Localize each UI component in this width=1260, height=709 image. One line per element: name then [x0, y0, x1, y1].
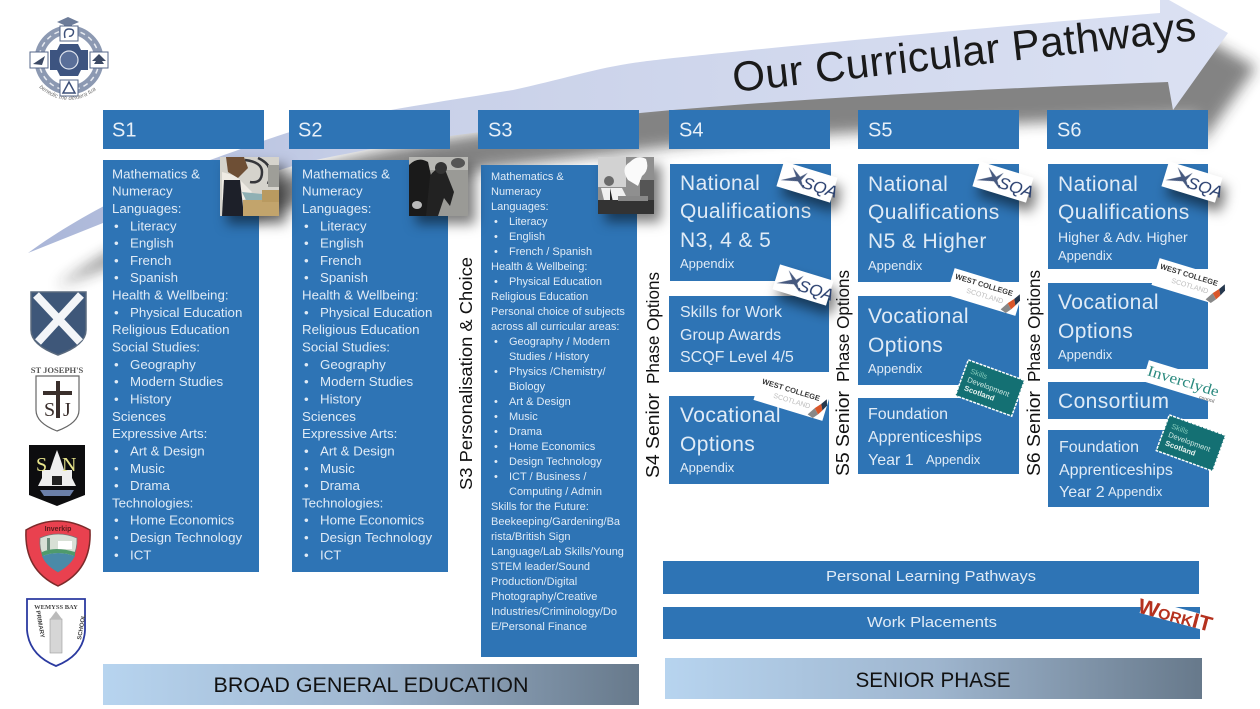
panel: S2 subjects: •: [304, 530, 309, 545]
panel: S2 subjects: History: [320, 391, 362, 406]
panel: S3 subjects: Skills for the Future:: [491, 501, 589, 513]
icon: SQA badge S4 skills: SQA: [796, 276, 836, 305]
panel: S2 subjects: •: [304, 478, 309, 493]
icon: St Ninian's shield: [29, 445, 85, 506]
panel: S1 subjects: Art & Design: [130, 443, 205, 458]
panel: S2 subjects: •: [304, 513, 309, 528]
panel: S6 Vocational Options: Vocational: [1058, 291, 1159, 314]
panel: S3 subjects: Design Technology: [509, 456, 602, 468]
icon: West College Scotland badge S4: WEST COLLEGE: [761, 377, 821, 403]
panel: S4 Skills for Work: Skills for Work: [680, 304, 783, 321]
panel: S4 header: [669, 110, 830, 149]
panel: S5 National Qualifications: N5 & Higher: [868, 230, 987, 253]
panel: S2 subjects: Design Technology: [320, 530, 432, 545]
bar: Work Placements: [663, 607, 1200, 639]
icon: Skills Development Scotland badge S5: Scotland: [963, 384, 996, 403]
icon: Wemyss Bay Primary School shield: PRIMARY: [34, 610, 45, 638]
panel: S6 Consortium: [1048, 382, 1208, 419]
panel: S5 National Qualifications: National: [868, 173, 948, 196]
panel: S2 subjects: •: [304, 270, 309, 285]
panel: S1 subjects: •: [114, 253, 119, 268]
title: Our Curricular Pathways: [730, 2, 1198, 101]
panel: S4 Vocational Options: Vocational: [680, 404, 781, 427]
panel: S1 subjects: Literacy: [130, 218, 177, 233]
panel: S2 subjects: •: [304, 253, 309, 268]
panel: S3 subjects: Art & Design: [509, 396, 571, 408]
panel: S6 Foundation Apprenticeships: Apprenticeships: [1059, 462, 1173, 479]
panel: S5 header: S5: [868, 120, 892, 142]
icon: Wemyss Bay Primary School shield: WEMYSS BAY: [34, 604, 78, 611]
panel: S1 subjects: French: [130, 253, 171, 268]
panel: S4 Skills for Work: Group Awards: [680, 327, 781, 344]
banner: Broad General Education: [103, 664, 639, 705]
panel: S2 subjects: •: [304, 236, 309, 251]
panel: S3 subjects: Languages:: [491, 201, 548, 213]
panel: S1 subjects: Health & Wellbeing:: [112, 288, 229, 303]
panel: S1 subjects: English: [130, 236, 174, 251]
panel: S3 subjects: Music: [509, 411, 538, 423]
photo: S3 classroom in black and white: [598, 157, 654, 214]
panel: S3 subjects: •: [494, 231, 498, 243]
panel: S4 Vocational Options: Options: [680, 433, 755, 456]
panel: S6 Vocational Options: Appendix: [1058, 347, 1113, 362]
icon: West College Scotland badge S5: [946, 268, 1024, 316]
panel: S3 subjects: •: [494, 216, 498, 228]
panel: S4 National Qualifications: N3, 4 & 5: [680, 229, 771, 252]
panel: S3 subjects: Drama: [509, 426, 543, 438]
panel: S2 subjects: Technologies:: [302, 495, 383, 510]
panel: S3 subjects: Industries/Criminology/Do: [491, 606, 617, 618]
panel: S2 subjects: Numeracy: [302, 184, 363, 199]
panel: S4 National Qualifications: National: [680, 172, 760, 195]
panel: S1 subjects: Technologies:: [112, 495, 193, 510]
icon: Skills Development Scotland badge S6: Development: [1167, 430, 1213, 454]
panel: S1 subjects: •: [114, 236, 119, 251]
rotated label: S6: Phase Options: [1024, 270, 1044, 382]
icon: St Joseph's shield: ST JOSEPH'S: [31, 365, 84, 375]
panel: S3 subjects: rista/British Sign: [491, 531, 570, 543]
banner: Senior Phase: [665, 658, 1202, 699]
icon: Skills Development Scotland badge S5: [955, 360, 1025, 416]
photo: S1 pupil in workshop: [220, 157, 279, 216]
panel: S6 Consortium: Consortium: [1058, 390, 1169, 413]
panel: S3 subjects: Physics /Chemistry/: [509, 366, 607, 378]
panel: S3 subjects: Mathematics &: [491, 171, 564, 183]
icon: West College Scotland badge S6: [1151, 258, 1229, 306]
panel: S1 subjects: Modern Studies: [130, 374, 223, 389]
rotated label: S4: S4 Senior: [642, 393, 663, 478]
panel: S3 subjects: •: [494, 441, 498, 453]
panel: S1 header: S1: [112, 120, 136, 142]
icon: West College Scotland badge S6: SCOTLAND: [1170, 278, 1209, 296]
panel: S5 Vocational Options: Vocational: [868, 305, 969, 328]
panel: S6 National Qualifications: Appendix: [1058, 248, 1113, 263]
icon: St Joseph's shield: [31, 365, 84, 431]
icon: SQA badge S4: [776, 161, 841, 204]
panel: S3 subjects: [481, 165, 637, 657]
panel: S1 subjects: •: [114, 478, 119, 493]
panel: S5 header: [858, 110, 1019, 149]
panel: S2 subjects: •: [304, 305, 309, 320]
icon: West College Scotland badge S6: WEST COLLEGE: [1159, 262, 1219, 288]
panel: S3 subjects: Biology: [509, 381, 546, 393]
panel: S4 National Qualifications: Qualifications: [680, 200, 812, 223]
panel: S1 subjects: •: [114, 357, 119, 372]
icon: SQA badge S5: [972, 161, 1037, 204]
panel: S1 subjects: Music: [130, 461, 165, 476]
panel: S4 Skills for Work: SCQF Level 4/5: [680, 349, 794, 366]
bar: Personal Learning Pathways: Personal Learning Pathways: [826, 568, 1036, 585]
panel: S1 subjects: Drama: [130, 478, 171, 493]
panel: S5 Foundation Apprenticeships: Apprenticeships: [868, 429, 982, 446]
panel: S2 subjects: •: [304, 357, 309, 372]
panel: S2 subjects: •: [304, 461, 309, 476]
rotated label: S4: [642, 272, 663, 478]
panel: S3 subjects: Studies / History: [509, 351, 590, 363]
panel: S1 subjects: Spanish: [130, 270, 178, 285]
panel: S1 subjects: •: [114, 461, 119, 476]
panel: S1 subjects: [103, 160, 259, 572]
icon: West College Scotland badge S5: WEST COLLEGE: [954, 272, 1014, 298]
panel: S1 subjects: Home Economics: [130, 513, 235, 528]
icon: Skills Development Scotland badge S6: Skills: [1170, 422, 1190, 436]
panel: S3 subjects: •: [494, 396, 498, 408]
icon: WorkIT badge: WORKIT: [1135, 595, 1215, 637]
panel: S1 subjects: •: [114, 305, 119, 320]
panel: S6 National Qualifications: National: [1058, 173, 1138, 196]
panel: S3 subjects: Literacy: [509, 216, 548, 228]
rotated label: S6: [1023, 270, 1044, 476]
panel: S3 subjects: ICT / Business /: [509, 471, 587, 483]
panel: S5 Foundation Apprenticeships: [858, 398, 1019, 474]
panel: S1 subjects: Languages:: [112, 201, 182, 216]
icon: St Joseph's shield: S: [44, 399, 55, 421]
icon: Skills Development Scotland badge S5: Skills: [969, 367, 989, 381]
panel: S3 subjects: Personal choice of subjects: [491, 306, 625, 318]
panel: S3 subjects: Production/Digital: [491, 576, 577, 588]
panel: S2 subjects: •: [304, 218, 309, 233]
panel: S3 subjects: •: [494, 471, 498, 483]
panel: S2 subjects: •: [304, 374, 309, 389]
icon: Inverclyde Council badge: [1142, 360, 1224, 406]
panel: S6 Foundation Apprenticeships: [1048, 430, 1209, 507]
panel: S2 subjects: Drama: [320, 478, 361, 493]
icon: St Joseph's shield: J: [63, 399, 71, 421]
panel: S1 subjects: Religious Education: [112, 322, 230, 337]
panel: S2 subjects: Literacy: [320, 218, 367, 233]
panel: S3 header: S3: [488, 120, 512, 142]
panel: S2 subjects: •: [304, 443, 309, 458]
panel: S3 subjects: •: [494, 366, 498, 378]
panel: S2 header: [289, 110, 450, 149]
panel: S3 header: [478, 110, 639, 149]
panel: S2 subjects: Music: [320, 461, 355, 476]
icon: Inverkip Primary School shield: Inverkip: [45, 526, 71, 533]
icon: Skills Development Scotland badge S6: Scotland: [1164, 439, 1197, 458]
panel: S2 subjects: Home Economics: [320, 513, 425, 528]
bar: Work Placements: Work Placements: [867, 614, 997, 631]
panel: S1 subjects: Sciences: [112, 409, 166, 424]
icon: Wemyss Bay Primary School shield: SCHOOL: [77, 614, 87, 640]
panel: S6 Foundation Apprenticeships: Year 2: [1059, 484, 1105, 501]
panel: S1 subjects: Expressive Arts:: [112, 426, 207, 441]
panel: S1 subjects: Physical Education: [130, 305, 242, 320]
icon: SQA badge S4 skills: [772, 264, 837, 307]
panel: S1 subjects: Social Studies:: [112, 340, 200, 355]
panel: S5 National Qualifications: [858, 164, 1019, 282]
panel: S3 subjects: •: [494, 411, 498, 423]
icon: St Ninian's shield: N: [62, 454, 76, 476]
panel: S3 subjects: E/Personal Finance: [491, 621, 587, 633]
icon: school shield, St Columba's saltire: [31, 292, 86, 355]
panel: S2 subjects: Art & Design: [320, 443, 395, 458]
panel: S1 subjects: •: [114, 530, 119, 545]
panel: S3 subjects: •: [494, 426, 498, 438]
panel: S1 subjects: History: [130, 391, 172, 406]
panel: S3 subjects: Health & Wellbeing:: [491, 261, 587, 273]
panel: S1 subjects: •: [114, 547, 119, 562]
panel: S3 subjects: French / Spanish: [509, 246, 592, 258]
icon: SQA badge S6: [1161, 161, 1226, 204]
panel: S2 subjects: •: [304, 391, 309, 406]
panel: S1 subjects: •: [114, 270, 119, 285]
panel: S1 subjects: •: [114, 443, 119, 458]
panel: S1 subjects: •: [114, 218, 119, 233]
panel: S3 subjects: Beekeeping/Gardening/Ba: [491, 516, 621, 528]
panel: S2 subjects: ICT: [320, 547, 341, 562]
panel: S6 header: [1047, 110, 1208, 149]
panel: S3 subjects: Language/Lab Skills/Young: [491, 546, 624, 558]
panel: S2 subjects: •: [304, 547, 309, 562]
panel: S3 subjects: •: [494, 336, 498, 348]
panel: S1 subjects: Geography: [130, 357, 196, 372]
panel: S1 header: [103, 110, 264, 149]
icon: Wemyss Bay Primary School shield: [27, 599, 87, 666]
panel: S5 National Qualifications: Qualifications: [868, 201, 1000, 224]
panel: S4 National Qualifications: Appendix: [680, 256, 735, 271]
icon: Skills Development Scotland badge S5: Development: [966, 375, 1012, 399]
panel: S2 subjects: Modern Studies: [320, 374, 413, 389]
panel: S4 Vocational Options: [669, 396, 829, 484]
panel: S3 subjects: across all curricular areas:: [491, 321, 619, 333]
banner: Broad General Education: BROAD GENERAL EDUCATION: [214, 674, 528, 697]
rotated label: S5: [832, 270, 853, 476]
panel: S5 Vocational Options: Appendix: [868, 361, 923, 376]
panel: S5 Vocational Options: [858, 296, 1019, 385]
panel: S6 Vocational Options: [1048, 283, 1208, 369]
panel: S1 subjects: •: [114, 513, 119, 528]
curved arrow banner: [28, 0, 1256, 287]
panel: S3 subjects: Physical Education: [509, 276, 602, 288]
rotated label: S3: S3 Personalisation & Choice: [456, 257, 476, 490]
panel: S1 subjects: Design Technology: [130, 530, 242, 545]
rotated label: S4: Phase Options: [643, 272, 663, 384]
panel: S2 subjects: Health & Wellbeing:: [302, 288, 419, 303]
panel: S3 subjects: STEM leader/Sound: [491, 561, 590, 573]
icon: SQA badge S4: SQA: [800, 173, 840, 202]
panel: S2 subjects: English: [320, 236, 364, 251]
panel: S3 subjects: •: [494, 246, 498, 258]
panel: S6 Foundation Apprenticeships: Appendix: [1108, 484, 1163, 499]
panel: S2 subjects: Mathematics &: [302, 166, 390, 181]
panel: S2 subjects: French: [320, 253, 361, 268]
panel: S2 subjects: Religious Education: [302, 322, 420, 337]
panel: S1 subjects: Numeracy: [112, 184, 173, 199]
icon: Inverclyde Council badge: council: [1198, 395, 1215, 405]
icon: West College Scotland badge S4: SCOTLAND: [772, 393, 811, 411]
panel: S1 subjects: •: [114, 374, 119, 389]
rotated label: S5: S5 Senior: [832, 391, 853, 476]
panel: S2 subjects: Spanish: [320, 270, 368, 285]
icon: St Ninian's shield: S: [36, 454, 47, 476]
panel: S1 subjects: ICT: [130, 547, 151, 562]
banner: Senior Phase: SENIOR PHASE: [856, 669, 1010, 692]
panel: S1 subjects: Mathematics &: [112, 166, 200, 181]
icon: school crest: benedic me dextera tua: [39, 84, 96, 100]
icon: West College Scotland badge S5: SCOTLAND: [965, 288, 1004, 306]
panel: S2 subjects: Physical Education: [320, 305, 432, 320]
panel: S6 National Qualifications: Qualifications: [1058, 201, 1190, 224]
icon: Skills Development Scotland badge S6: [1156, 415, 1226, 471]
icon: Inverkip Primary School shield: [26, 521, 90, 586]
panel: S4 Vocational Options: Appendix: [680, 460, 735, 475]
panel: S3 subjects: Numeracy: [491, 186, 542, 198]
panel: S1 subjects: •: [114, 391, 119, 406]
panel: S5 Foundation Apprenticeships: Year 1: [868, 452, 914, 469]
panel: S3 subjects: Home Economics: [509, 441, 596, 453]
panel: S6 National Qualifications: Higher & Adv. Higher: [1058, 229, 1188, 245]
panel: S2 subjects: Languages:: [302, 201, 372, 216]
panel: S2 subjects: [292, 160, 448, 572]
panel: S3 subjects: Religious Education: [491, 291, 588, 303]
rotated label: S5: Phase Options: [833, 270, 853, 382]
photo: S2 pupils in black and white: [409, 157, 468, 216]
panel: S5 National Qualifications: Appendix: [868, 258, 923, 273]
panel: S2 subjects: Social Studies:: [302, 340, 390, 355]
panel: S6 National Qualifications: [1048, 164, 1208, 269]
icon: West College Scotland badge S4: [753, 373, 831, 421]
panel: S3 subjects: •: [494, 456, 498, 468]
panel: S6 Vocational Options: Options: [1058, 320, 1133, 343]
panel: S5 Foundation Apprenticeships: Foundation: [868, 406, 948, 423]
panel: S4 Skills for Work: [669, 296, 829, 372]
panel: S3 subjects: Photography/Creative: [491, 591, 597, 603]
panel: S3 subjects: •: [494, 276, 498, 288]
panel: S3 subjects: Computing / Admin: [509, 486, 602, 498]
icon: SQA badge S6: SQA: [1185, 173, 1225, 202]
icon: Inverclyde Council badge: Inverclyde: [1145, 364, 1221, 401]
bar: Personal Learning Pathways: [663, 561, 1199, 594]
panel: S4 National Qualifications: [670, 164, 831, 281]
icon: school crest: [30, 17, 108, 100]
panel: S6 header: S6: [1057, 120, 1081, 142]
panel: S5 Foundation Apprenticeships: Appendix: [926, 452, 981, 467]
panel: S2 header: S2: [298, 120, 322, 142]
icon: SQA badge S5: SQA: [996, 173, 1036, 202]
panel: S2 subjects: Geography: [320, 357, 386, 372]
panel: S4 header: S4: [679, 120, 703, 142]
panel: S6 Foundation Apprenticeships: Foundation: [1059, 439, 1139, 456]
panel: S3 subjects: Geography / Modern: [509, 336, 610, 348]
panel: S2 subjects: Sciences: [302, 409, 356, 424]
panel: S3 subjects: English: [509, 231, 545, 243]
panel: S2 subjects: Expressive Arts:: [302, 426, 397, 441]
rotated label: S6: S6 Senior: [1023, 391, 1044, 476]
panel: S5 Vocational Options: Options: [868, 334, 943, 357]
